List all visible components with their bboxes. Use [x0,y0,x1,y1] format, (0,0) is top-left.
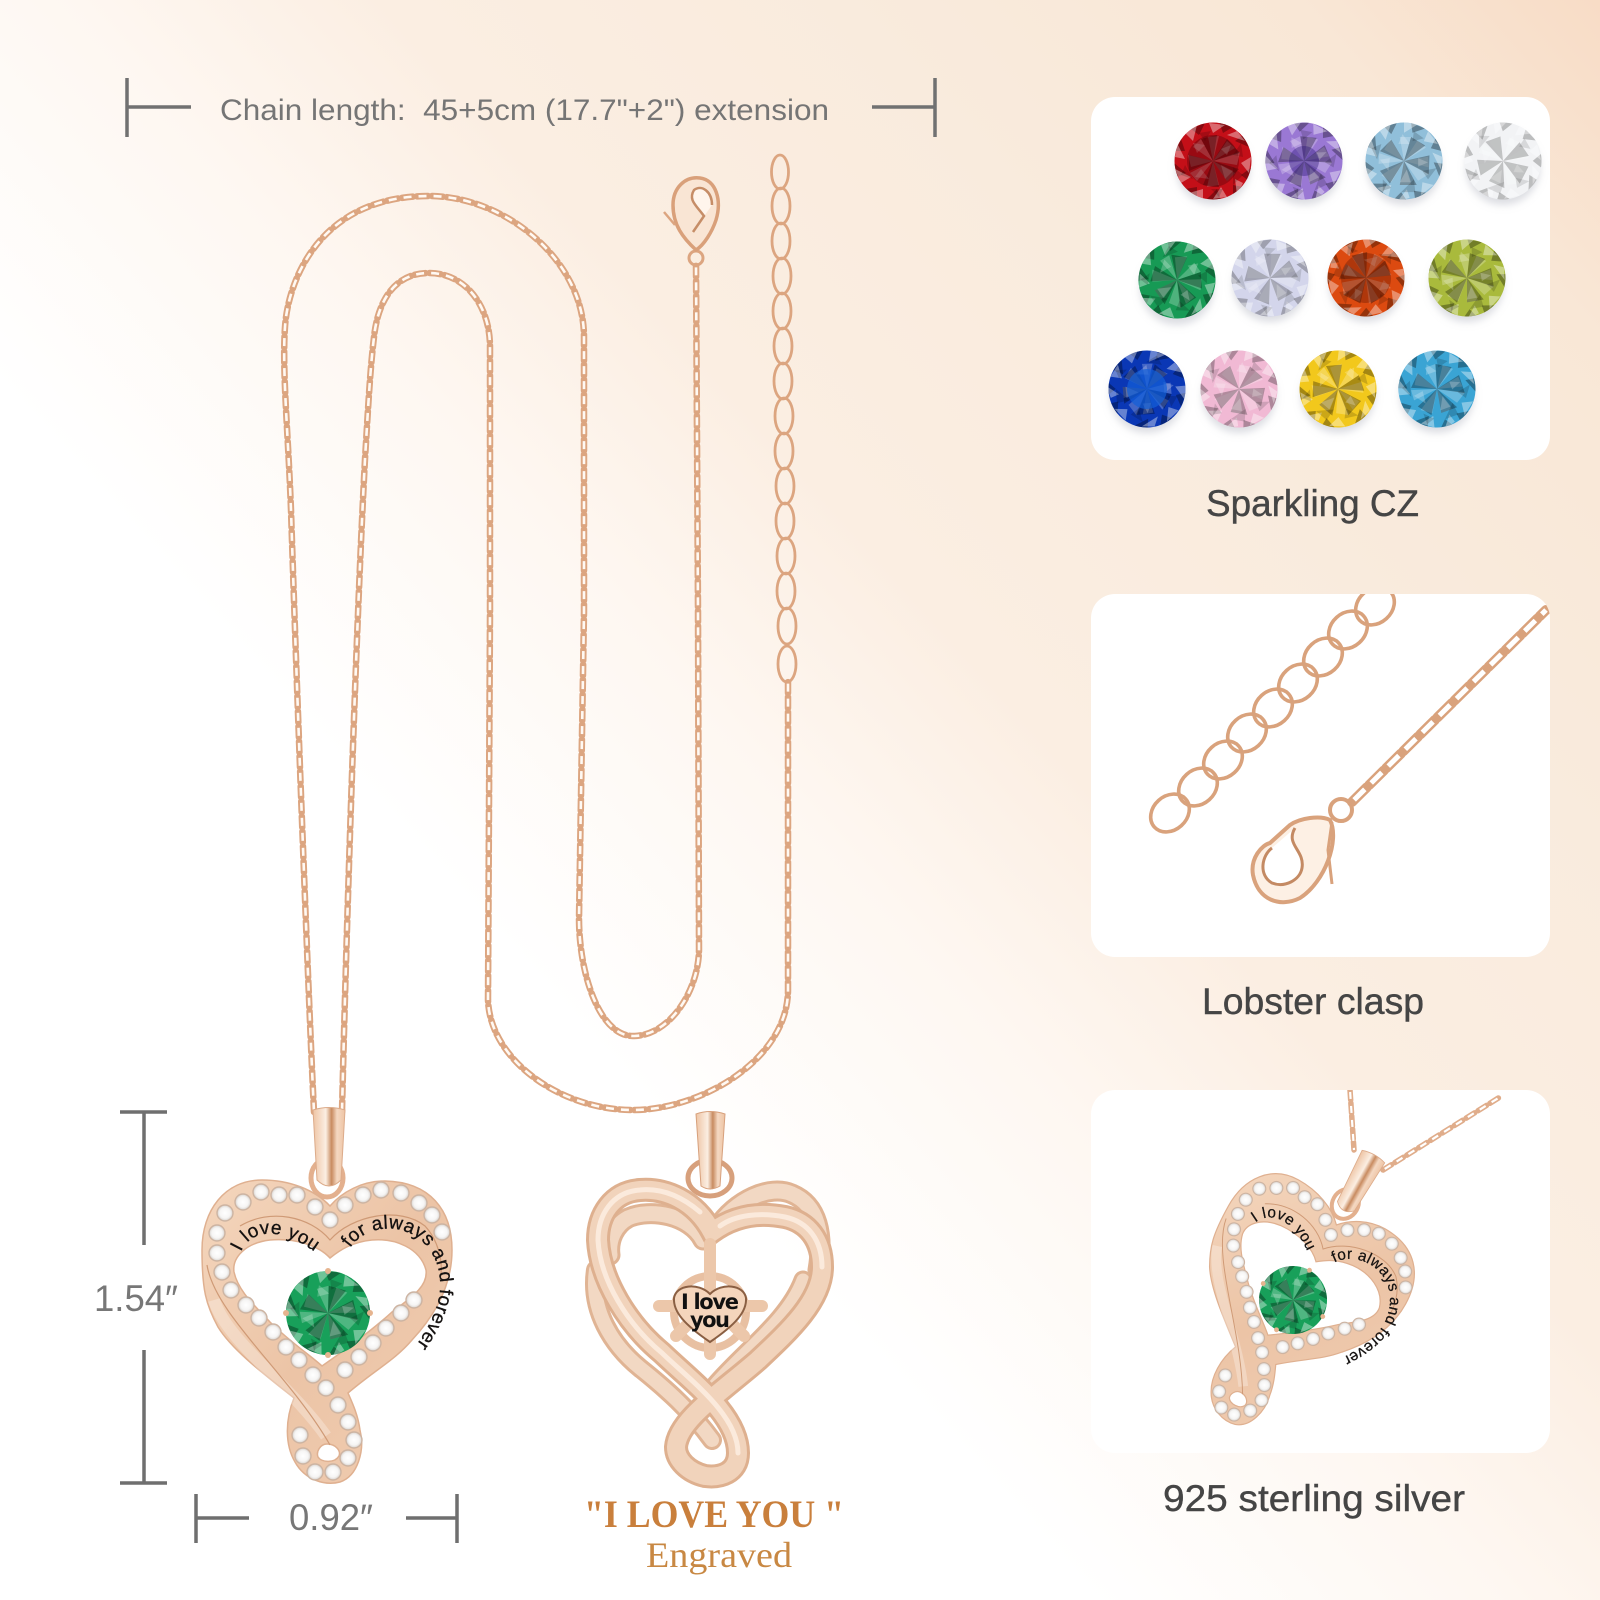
gem: lavender [1222,230,1318,326]
lobster clasp on chain [664,178,718,265]
engraved text for always and forever: for always and forever [1331,1250,1398,1364]
engraved text I love you: I love you [230,1223,320,1251]
gem: aqua [1385,337,1489,441]
width label: 0.92″ [289,1497,373,1538]
chain length dimension [127,78,935,137]
gem: orange [1316,228,1416,328]
small heart with engraved text [674,1286,746,1342]
stem and prongs [659,1244,762,1354]
dimension: width 0.92 inch [196,1494,457,1543]
gem: yellow [1296,347,1380,431]
panel: lobster clasp card [1091,594,1550,957]
gem: green [1132,235,1222,325]
label: Sparkling CZ: Sparkling CZ [1206,483,1419,524]
height label: 1.54″ [94,1278,178,1319]
photo: extension chain and clasp [1143,579,1546,902]
caption: Engraved: Engraved [646,1535,792,1575]
necklace chain [284,196,788,1112]
gem: sapphire blue [1092,334,1202,444]
gem: olive [1413,224,1521,332]
engraved text for always and forever: for always and forever [340,1214,454,1350]
lobster clasp [1253,818,1333,902]
gem: light blue [1349,106,1459,216]
panel: sparkling CZ card [1091,97,1550,460]
panel: sterling silver card [1091,1090,1550,1453]
label: Lobster clasp: Lobster clasp [1202,981,1424,1022]
pendant chains [1350,1090,1500,1170]
engraved text I love you: I love you [1250,1206,1314,1250]
caption: I LOVE YOU: "I LOVE YOU " [584,1493,844,1536]
pendant front with green stone [201,1107,454,1484]
chain length label: Chain length: 45+5cm (17.7"+2") extension [220,94,829,127]
front strand of the heart [598,1190,822,1476]
gem: pink [1185,335,1293,443]
engraved I love you: I love [681,1290,739,1314]
gem: white [1453,111,1553,211]
pendant back engraved [595,1112,822,1476]
ring behind small heart [674,1276,746,1348]
gem: red [1174,122,1252,200]
angled pendant [1209,1150,1415,1426]
engraved you: you [690,1308,730,1332]
gem: purple [1254,111,1354,211]
gem colour swatches [1092,106,1553,444]
extension chain links [772,155,796,682]
back strands of the heart [595,1191,820,1440]
label: 925 sterling silver: 925 sterling silver [1163,1478,1465,1519]
photo: pendant angled [1209,1090,1502,1426]
dimension: height 1.54 inch [94,1112,178,1483]
bail [696,1112,725,1189]
